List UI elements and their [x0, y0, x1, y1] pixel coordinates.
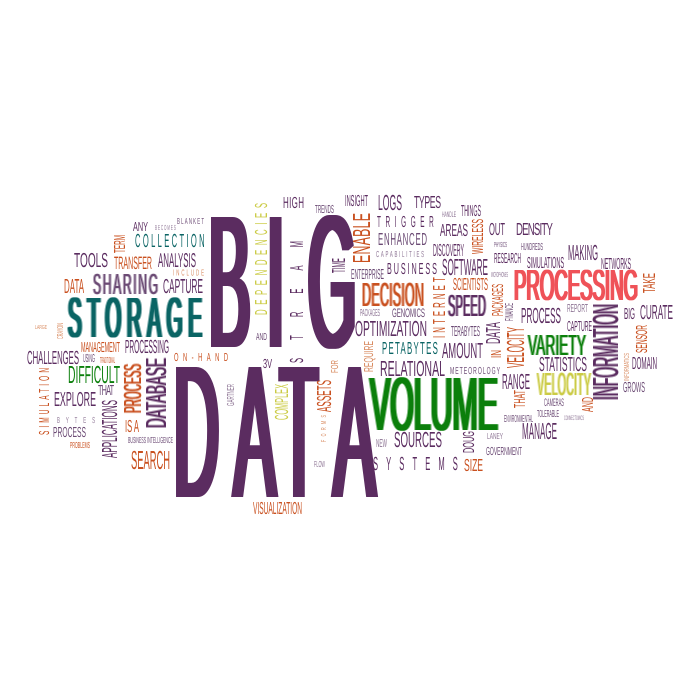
word cloud: SIZE: [464, 455, 483, 475]
word cloud: TERM: [112, 235, 129, 253]
word cloud: TAKE: [639, 273, 659, 293]
word: REQUIRE: REQUIRE: [361, 341, 376, 372]
word cloud: VOLUME: [370, 363, 498, 447]
word cloud: VISUALIZATION: [253, 498, 302, 518]
word cloud: PACKAGES: [490, 284, 507, 316]
heading word: BIG: BIG: [209, 177, 356, 388]
word cloud: RESEARCH: [494, 251, 521, 267]
word cloud: GARTNER: [226, 384, 237, 406]
word cloud: HUNDREDS: [521, 242, 543, 253]
word cloud: AREAS: [440, 220, 468, 240]
word cloud: CHALLENGES: [27, 348, 79, 369]
word cloud: TOOLS: [74, 250, 108, 272]
word cloud: NETWORKS: [601, 256, 631, 273]
word cloud: TRENDS: [315, 203, 334, 216]
word cloud: SEARCH: [131, 445, 170, 475]
word: INTERNET: INTERNET: [429, 277, 449, 338]
word cloud: SPEED: [448, 289, 486, 323]
word cloud: AND: [580, 397, 597, 412]
word cloud: TERABYTES: [451, 324, 480, 340]
word: LANEY: LANEY: [487, 431, 503, 441]
word cloud: CRAYON: [55, 323, 65, 339]
word cloud: SENSOR: [634, 325, 651, 353]
word cloud: ENVIRONMENTAL: [504, 414, 533, 425]
word cloud: MICROPHONES: [491, 270, 508, 279]
word: LARGE: LARGE: [35, 324, 47, 331]
word cloud: PACKAGES: [360, 308, 380, 319]
word cloud: IS A: [125, 416, 139, 436]
word cloud: VELOCITY: [537, 366, 591, 402]
word cloud: LOGS: [378, 190, 402, 215]
word: FORMS: FORMS: [319, 415, 328, 442]
word: INCLUDE: INCLUDE: [173, 268, 204, 278]
word cloud: PHYSICS: [494, 240, 507, 249]
word cloud: CAPTURE: [567, 319, 592, 335]
word: STREAM: STREAM: [287, 241, 308, 363]
word: METEOROLOGY: METEOROLOGY: [450, 366, 500, 377]
word cloud: PROCESSING: [125, 337, 169, 358]
word cloud: ANALYSIS: [158, 250, 196, 272]
word cloud: ENTERPRISE: [351, 267, 384, 283]
word cloud: EXPLORE: [54, 389, 96, 411]
word: GENOMICS: GENOMICS: [392, 306, 425, 320]
word cloud: SCIENTISTS: [453, 274, 488, 294]
word cloud: REPORT: [567, 302, 588, 315]
word cloud: OPTIMIZATION: [355, 316, 427, 341]
word: PETABYTES: PETABYTES: [382, 338, 438, 358]
word cloud: USING: [83, 352, 95, 365]
word: DEPENDENCIES: DEPENDENCIES: [251, 203, 271, 315]
word cloud: BUSINESS INTELLIGENCE: [128, 435, 173, 445]
word: DENSITY: DENSITY: [516, 219, 553, 239]
word cloud: INSIGHT: [345, 193, 368, 210]
word cloud: VARIETY: [528, 330, 586, 362]
word cloud: TOLERABLE: [537, 409, 559, 420]
word cloud: TRANSFER: [114, 253, 152, 273]
word cloud: INFORMATION: [585, 304, 626, 400]
word: TRIGGER: TRIGGER: [377, 214, 434, 231]
word: BUSINESS: BUSINESS: [387, 261, 437, 278]
word cloud: COMPLEX: [272, 384, 293, 420]
word cloud: THAT: [512, 390, 529, 408]
word cloud: MANAGE: [522, 418, 557, 444]
word cloud: CONNECTOMICS: [564, 415, 584, 422]
word cloud: VELOCITY: [503, 327, 530, 368]
word: SHARING: SHARING: [93, 269, 158, 301]
word cloud: PROCESS: [53, 425, 86, 441]
heading word: DATA: DATA: [174, 327, 375, 538]
word cloud: MANAGEMENT: [81, 340, 120, 356]
word: INFORMATICS: INFORMATICS: [622, 353, 631, 381]
word cloud: PROCESS: [521, 303, 561, 328]
word cloud: HANDLE: [442, 210, 456, 219]
word cloud: DECISION: [362, 277, 424, 314]
word: ENHANCED: ENHANCED: [378, 229, 427, 249]
word cloud: DATA: [64, 276, 84, 298]
word cloud: AMOUNT: [442, 338, 483, 363]
word cloud: DISCOVERY: [433, 240, 464, 260]
word: SYSTEMS: SYSTEMS: [373, 454, 458, 475]
word cloud: SIMULATIONS: [527, 255, 564, 272]
word: SIMULATION: SIMULATION: [37, 368, 53, 435]
word: BECOMES: BECOMES: [155, 223, 176, 232]
word cloud: DATA: [483, 322, 505, 344]
word cloud: ASSETS: [314, 380, 336, 412]
word: FOR: FOR: [330, 360, 341, 373]
word: ON-HAND: ON-HAND: [174, 351, 228, 364]
word cloud: APPLICATIONS: [97, 400, 122, 458]
word: ANY: ANY: [133, 219, 148, 234]
word cloud: CAPTURE: [163, 276, 203, 298]
word cloud: TIME: [329, 258, 350, 273]
word cloud: SOURCES: [394, 427, 442, 452]
word cloud: GOVERNMENT: [486, 445, 522, 458]
word cloud: FINANCE: [503, 303, 516, 321]
word: 3V: 3V: [263, 356, 272, 371]
word: TYPES: TYPES: [414, 192, 441, 212]
word: COLLECTION: COLLECTION: [135, 231, 205, 252]
word: BLANKET: BLANKET: [177, 216, 204, 226]
word cloud: DOUG: [461, 431, 478, 453]
word: CAPABILITIES: CAPABILITIES: [376, 249, 424, 259]
word cloud: STATISTICS: [539, 354, 587, 376]
word cloud: CAMERAS: [544, 397, 564, 409]
word cloud: PROBLEMS: [70, 440, 90, 450]
word: ENABLE: ENABLE: [349, 213, 376, 263]
word cloud: TRADITIONAL: [100, 355, 115, 365]
word cloud: RANGE: [502, 369, 530, 394]
word: STORAGE: STORAGE: [68, 287, 202, 350]
word cloud: PROCESS: [120, 364, 147, 413]
word cloud: DOMAIN: [632, 353, 657, 373]
word cloud: WIRELESS: [470, 219, 487, 254]
word cloud: RELATIONAL: [380, 356, 445, 381]
word cloud: OUT: [489, 219, 505, 239]
word cloud: FLOW: [314, 459, 325, 469]
word cloud: DATABASE: [141, 358, 173, 428]
word: AND: AND: [256, 332, 267, 343]
word cloud: NEW: [376, 437, 387, 450]
word cloud: SOFTWARE: [442, 254, 488, 280]
word cloud: BIG: [624, 306, 635, 323]
word cloud: MAKING: [568, 240, 598, 265]
word: THAT left: THAT: [98, 383, 114, 399]
word: BYTES: BYTES: [57, 415, 95, 425]
word: HIGH: HIGH: [283, 195, 304, 212]
word cloud: THINGS: [461, 203, 481, 220]
word cloud: DIFFICULT: [68, 362, 120, 389]
word cloud: GROWS: [623, 380, 645, 396]
word: IN: IN: [489, 350, 505, 358]
